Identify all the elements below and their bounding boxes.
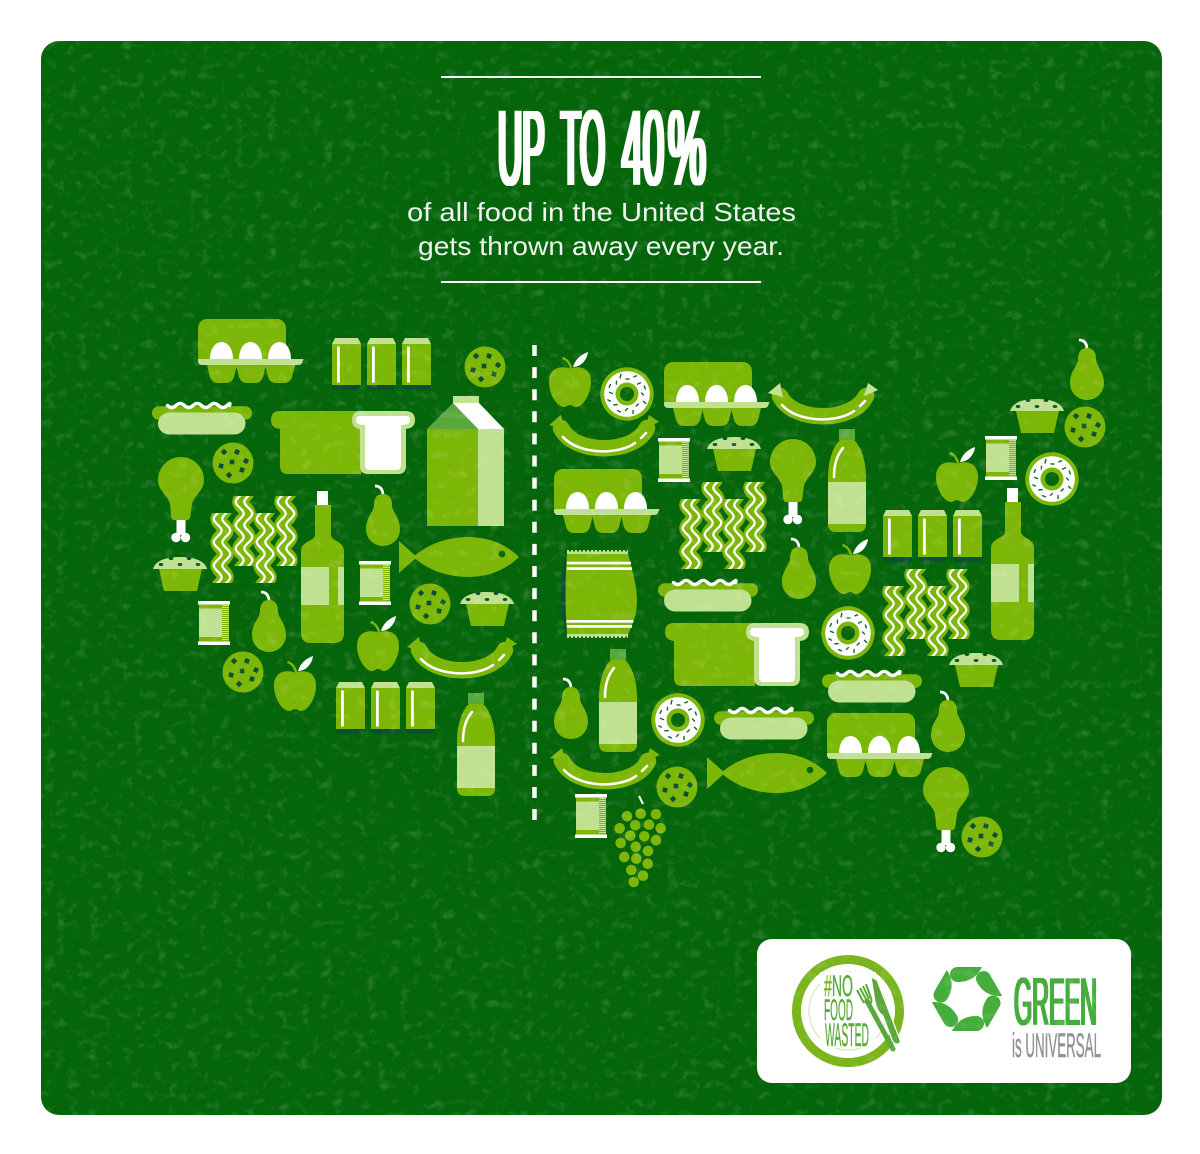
icon: donut (1025, 452, 1079, 506)
icon: bread loaf (271, 411, 415, 474)
icon: apple (274, 656, 316, 711)
logo: No Food Wasted: WASTED (825, 1017, 869, 1053)
icon: pear (252, 592, 286, 652)
icon: cookie (410, 584, 450, 624)
logo box (757, 939, 1131, 1083)
icon: bacon (214, 484, 294, 595)
icon: fish (707, 753, 827, 793)
icon: pear (782, 539, 816, 599)
icon: cookie (222, 652, 264, 692)
icon: three cans (332, 338, 431, 390)
icon: chicken leg (770, 439, 816, 524)
map: eastern food icons (549, 340, 1106, 887)
icon: milk carton (427, 396, 504, 526)
title: TO (561, 87, 605, 208)
logo: No Food Wasted: FOOD (824, 994, 853, 1027)
icon: sausage (407, 637, 517, 673)
icon: hot dog (152, 404, 252, 434)
white logo card (757, 939, 1131, 1083)
icon: hot dog (658, 580, 758, 612)
icon: egg carton (827, 713, 932, 777)
icon: pear (931, 692, 965, 752)
icon: cookie (212, 442, 254, 484)
icon: bacon (683, 470, 763, 581)
icon: donut (651, 693, 705, 747)
icon: hot dog (714, 708, 814, 740)
header block (407, 76, 796, 283)
icon: plastic bottle (457, 693, 495, 796)
icon: chicken leg (923, 767, 969, 852)
icon: muffin (1010, 399, 1064, 433)
icon: muffin (460, 592, 514, 626)
icon: egg carton (664, 362, 770, 426)
icon: bread loaf (665, 623, 809, 686)
icon: sausage (768, 383, 878, 419)
icon: donut (821, 606, 875, 660)
icon: plastic bottle (599, 649, 637, 752)
title: UP (498, 87, 544, 208)
icon: cookie (464, 346, 506, 388)
icon: apple (549, 352, 591, 407)
icon: wine bottle (301, 491, 344, 643)
dashed dividing line (532, 345, 537, 820)
icon: muffin (949, 653, 1003, 687)
icon: soup can (359, 561, 391, 605)
icon: cookie (1064, 406, 1106, 448)
top rule (441, 76, 761, 78)
icon: soup can (575, 794, 607, 838)
icon: cookie (656, 766, 698, 808)
icon: pear (554, 679, 588, 739)
title: 40 (622, 87, 664, 208)
icon: soup can (198, 601, 230, 645)
bottom rule (441, 281, 761, 283)
icon: pear (1070, 340, 1104, 400)
icon: cookie (962, 816, 1002, 858)
icon: bacon (886, 557, 966, 668)
icon: soup can (658, 438, 690, 482)
icon: wine bottle (991, 488, 1034, 640)
icon: three cans (336, 682, 435, 734)
icon: apple (357, 616, 399, 671)
header block: % (668, 87, 706, 208)
icon: muffin (707, 437, 761, 471)
icon: fish (399, 537, 519, 577)
icon: apple (936, 447, 978, 502)
icon: soup can (985, 436, 1017, 480)
icon: three cans (883, 510, 982, 562)
icon: chicken leg (158, 457, 204, 542)
icon: grapes (614, 796, 666, 887)
icon: pear (366, 486, 400, 546)
icon: muffin (153, 557, 207, 591)
map: western food icons (152, 319, 519, 796)
icon: sausage (549, 415, 659, 451)
icon: sausage (550, 748, 660, 784)
subtitle line 2: gets thrown away every year. (418, 231, 784, 261)
icon: plastic bottle (828, 429, 866, 532)
logo: pinwheel mark (931, 967, 1003, 1031)
icon: chip bag (561, 551, 637, 637)
icon: donut (600, 367, 654, 421)
icon: apple (829, 539, 871, 594)
logo: No Food Wasted: #NO (824, 970, 853, 1003)
logo: No Food Wasted (796, 960, 900, 1062)
icon: egg carton (198, 319, 304, 383)
icon: egg carton (554, 469, 660, 533)
subtitle line 1: of all food in the United States (407, 197, 796, 227)
icon: hot dog (822, 672, 922, 702)
